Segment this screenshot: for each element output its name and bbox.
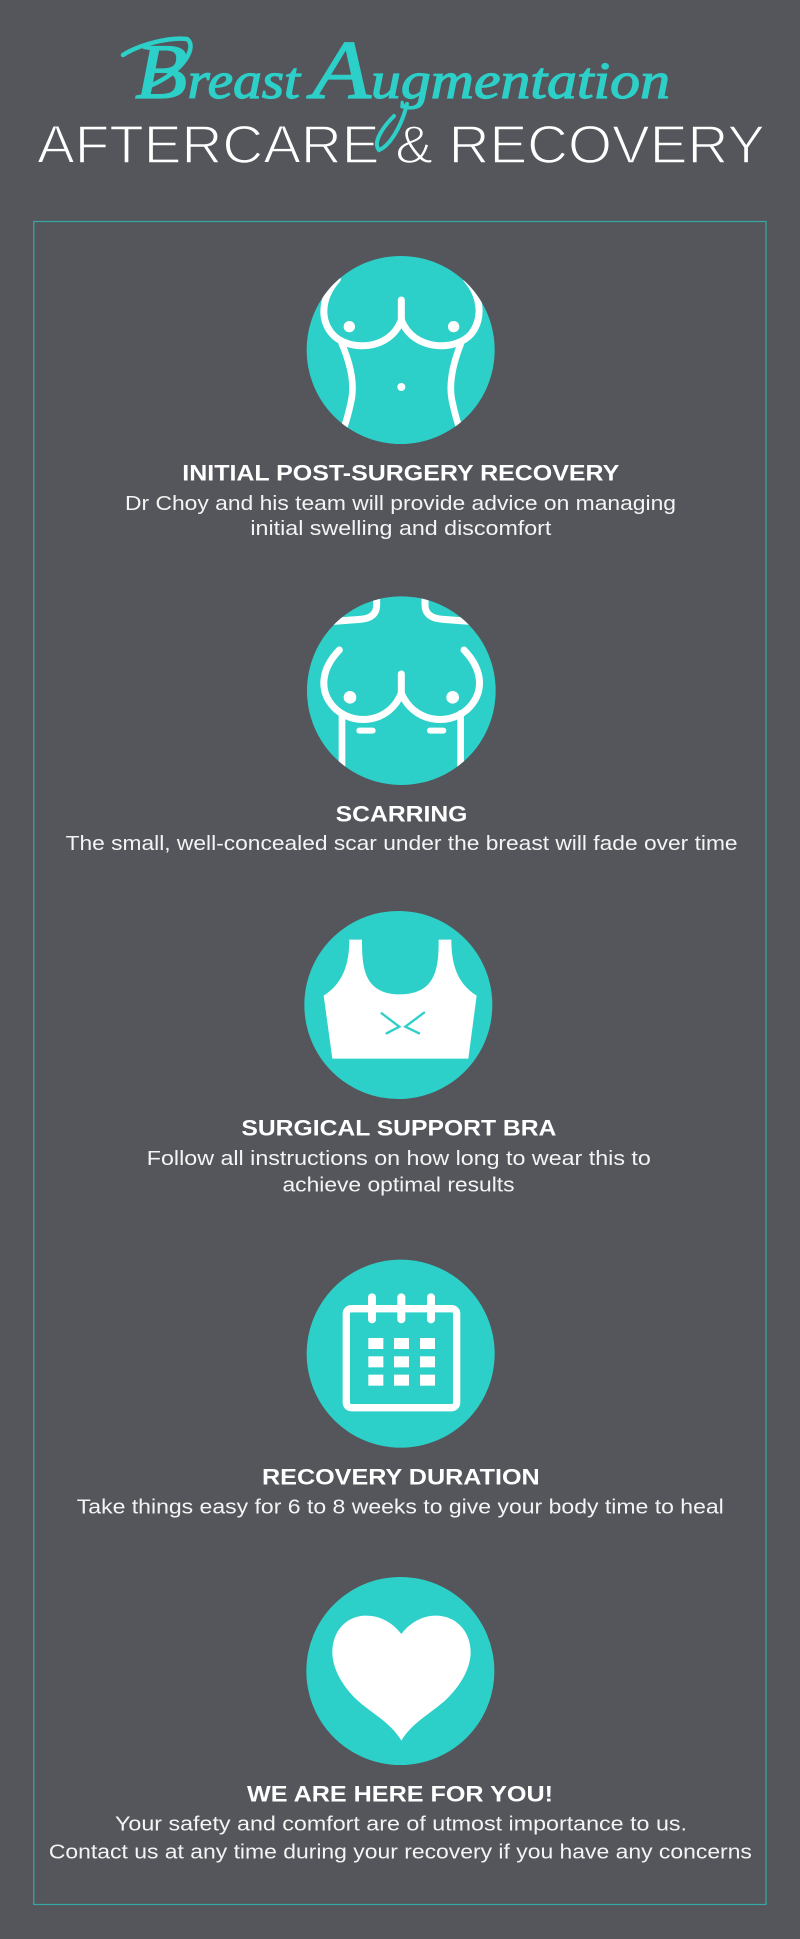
icon: surgical bra xyxy=(304,911,492,1099)
icon: calendar xyxy=(307,1260,495,1448)
text: initial recovery description: Dr Choy and his team will provide advice on managing xyxy=(125,492,676,515)
text: duration description: Take things easy for 6 to 8 weeks to give your body time to heal xyxy=(77,1495,724,1518)
text: support description: Contact us at any time during your recovery if you have any concerns xyxy=(49,1840,752,1863)
text: bra description xyxy=(147,1147,651,1197)
text: scarring description: The small, well-concealed scar under the breast will fade over time xyxy=(66,832,738,855)
panel: content border xyxy=(34,222,766,1904)
text: bra description: Follow all instructions on how long to wear this to xyxy=(147,1147,651,1170)
heading: recovery duration: RECOVERY DURATION xyxy=(262,1464,540,1489)
title: breast augmentation script xyxy=(123,24,670,150)
heading: initial post-surgery recovery: INITIAL POST-SURGERY RECOVERY xyxy=(182,461,619,486)
title: breast augmentation script: Breast xyxy=(135,28,302,115)
text: bra description: achieve optimal results xyxy=(282,1174,514,1197)
title: breast augmentation script: Augmentation xyxy=(306,24,670,117)
icon: chest with scars xyxy=(307,593,496,785)
heading: scarring: SCARRING xyxy=(336,802,467,827)
text: initial recovery description: initial swelling and discomfort xyxy=(250,517,552,540)
icon: heart xyxy=(306,1577,494,1765)
text: support description xyxy=(49,1813,752,1863)
icon: torso xyxy=(307,256,495,444)
title: aftercare and recovery: AFTERCARE & RECOVERY xyxy=(37,115,765,175)
text: support description: Your safety and comfort are of utmost importance to us. xyxy=(115,1813,687,1836)
text: initial recovery description xyxy=(125,492,676,540)
heading: surgical support bra: SURGICAL SUPPORT BRA xyxy=(241,1116,556,1141)
heading: we are here for you: WE ARE HERE FOR YOU! xyxy=(247,1782,553,1807)
